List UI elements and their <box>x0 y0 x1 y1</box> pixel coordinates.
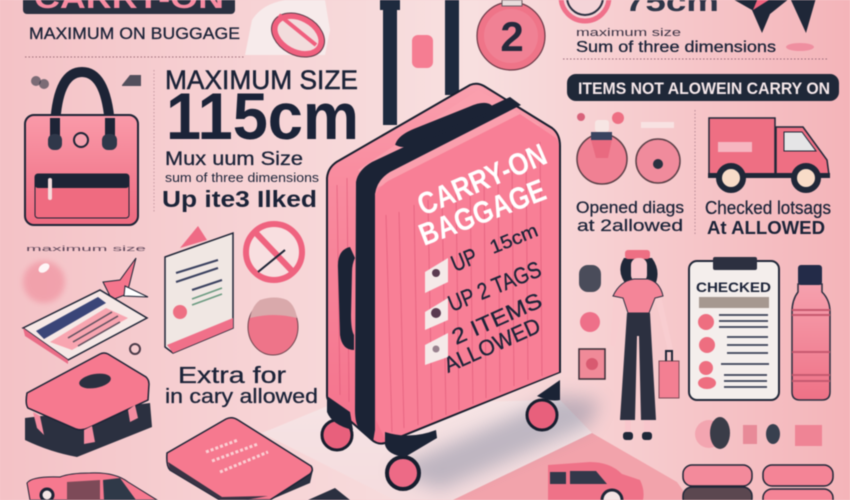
text: in carry allowed: in cary allowed <box>165 386 318 408</box>
icon: top right circle <box>561 0 609 21</box>
banner: items not allowed: ITEMS NOT ALOWEIN CARRY ON <box>578 79 830 98</box>
icon: jar <box>248 298 298 355</box>
icon: pink bottle <box>792 265 830 400</box>
text: up items: Up ite3 Ilked <box>162 186 317 212</box>
icon: number 2 badge: 2 <box>500 13 524 60</box>
floor <box>262 400 690 500</box>
decorative divider <box>563 58 828 60</box>
bottom small icons <box>695 417 822 449</box>
icon: hand with prohibited sign <box>245 0 332 66</box>
text: at allowed: at 2allowed <box>577 216 683 235</box>
icon: clipboard checklist <box>165 226 233 353</box>
icon: dark corner object <box>308 488 350 500</box>
icon: blob <box>23 261 65 303</box>
text: opened bags: Opened diags <box>576 198 684 217</box>
side handle <box>338 247 355 350</box>
icon: number 2 badge <box>477 0 545 70</box>
checklist: 2 ITEMS <box>448 288 546 350</box>
number 115cm: 115cm <box>166 79 359 153</box>
panel: opened bags <box>576 112 684 235</box>
checklist: UP 2 TAGS <box>444 256 545 317</box>
checklist: 15cm <box>487 220 541 259</box>
icon: flat pink suitcase <box>25 353 152 457</box>
panel: suitcase <box>322 84 600 490</box>
suitcase body <box>327 84 560 444</box>
panel: checked clipboard <box>689 257 779 400</box>
icon: boarding document <box>23 290 147 364</box>
icon: prohibited sign <box>246 224 302 280</box>
icon: red car <box>548 462 644 500</box>
panel: checked bags <box>705 118 831 238</box>
text: carry-on baggage: BAGGAGE <box>414 172 551 253</box>
caption: maximum size <box>26 244 146 253</box>
figure: woman with bag <box>610 250 679 440</box>
top handle <box>397 104 490 146</box>
bag small icons <box>31 75 141 89</box>
heading: MAXIMUM SIZE <box>165 65 358 95</box>
floor pink wedge <box>453 433 690 500</box>
text: maximum size: Mux uum Size <box>165 149 303 170</box>
icon: pink book <box>167 418 313 500</box>
small icons column <box>579 265 605 379</box>
checklist <box>440 220 546 378</box>
icon: airplane tail <box>103 258 148 300</box>
icon: airplane top right <box>731 0 816 51</box>
subtitle: MAXIMUM ON BUGGAGE <box>29 24 240 43</box>
text: maximum size: maximum size <box>576 27 681 39</box>
text: carry-on baggage <box>412 137 552 253</box>
icon: rolled items right <box>763 465 833 500</box>
decorative divider <box>25 56 245 58</box>
checklist: ALLOWED <box>440 313 544 378</box>
panel: top-left title <box>23 0 240 43</box>
panel: top right dimensions <box>576 0 776 56</box>
text: at allowed: At ALLOWED <box>707 218 825 238</box>
suitcase label text <box>412 137 552 378</box>
rear wheels <box>322 400 557 450</box>
text: checked: Checked lotsags <box>705 198 831 218</box>
icon: delivery truck <box>708 118 830 190</box>
ribs <box>337 142 542 432</box>
panel: maximum size <box>162 65 359 212</box>
corner guards <box>327 380 560 457</box>
text: sum of dimensions: sum of three dimensions <box>165 170 320 185</box>
front panel <box>375 114 559 441</box>
checkboxes <box>425 258 448 365</box>
text: sum of three dimensions: Sum of three dimensions <box>576 39 776 56</box>
top lid panel <box>358 90 540 188</box>
icon: telescoping handle <box>380 0 459 125</box>
zipper band <box>355 97 521 442</box>
text: extra for: Extra for <box>178 362 286 388</box>
panel: handbag <box>25 72 141 225</box>
checklist: UP <box>447 243 481 277</box>
text: carry-on baggage: CARRY-ON <box>412 137 552 222</box>
icon: rolled items left <box>683 465 752 500</box>
suitcase shadow <box>390 395 600 490</box>
icon: small pink car <box>27 473 157 500</box>
icon: round items <box>577 112 680 184</box>
banner: items not allowed <box>567 74 839 101</box>
clipboard heading: CHECKED <box>696 279 771 295</box>
small pink tag <box>412 35 433 68</box>
front wheel <box>387 457 419 489</box>
panel: extra text <box>165 362 318 408</box>
small icon <box>130 344 140 354</box>
